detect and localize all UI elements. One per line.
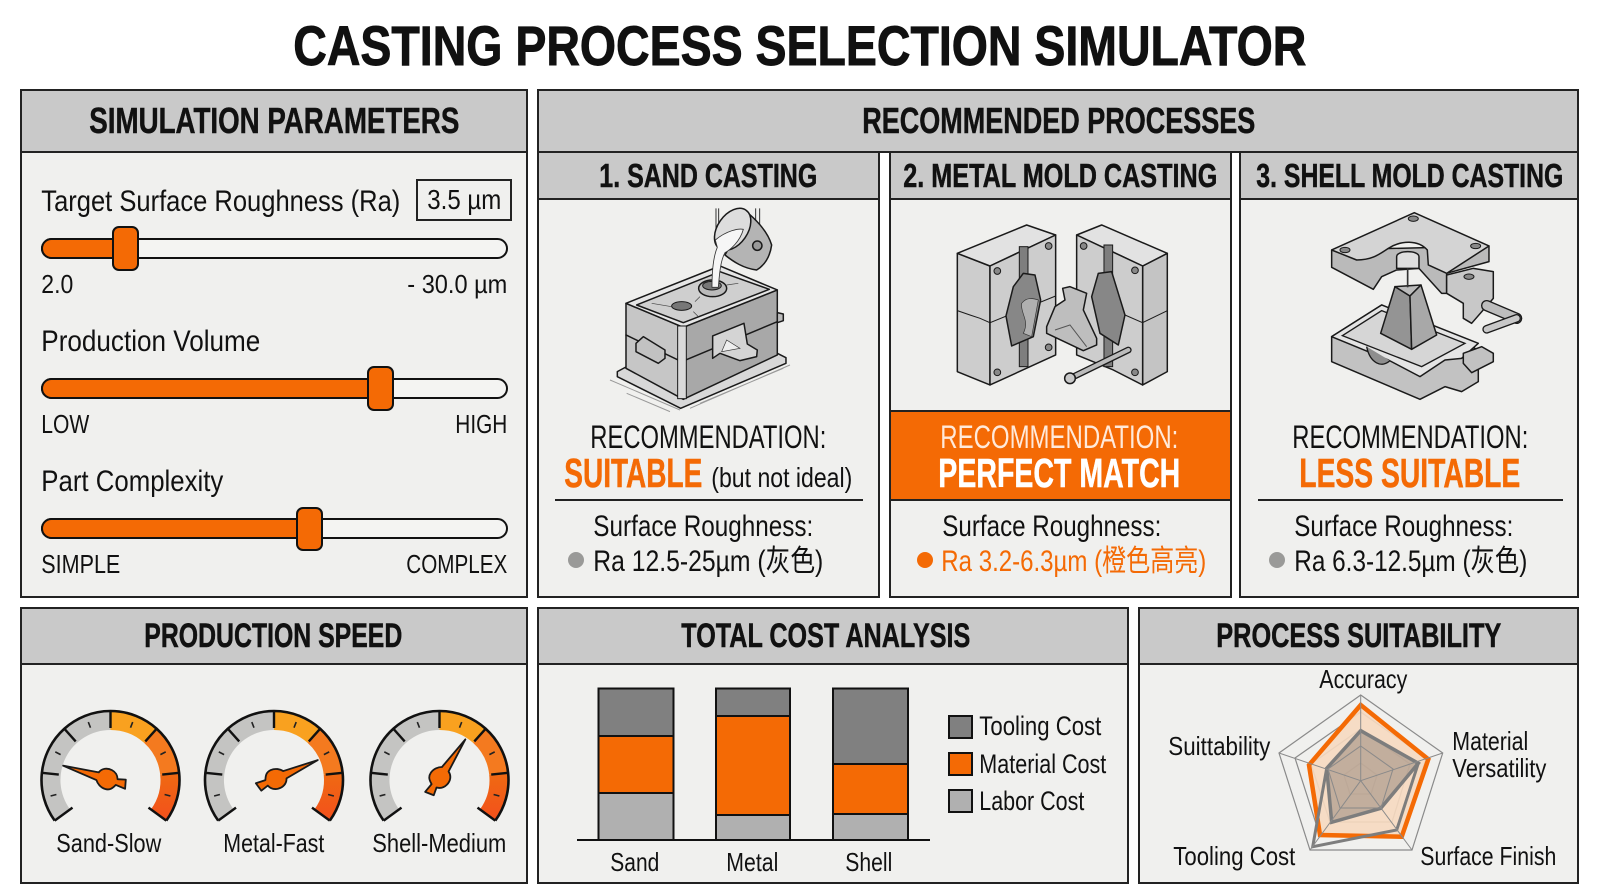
radar label: material versatility: Versatility [1452, 753, 1546, 783]
axis label: shell: Shell [845, 847, 892, 877]
heading: recommended processes: RECOMMENDED PROCESSES [862, 100, 1255, 141]
legend: Material Cost [979, 749, 1107, 779]
gauge: metal fast [205, 711, 343, 858]
status dot: gray [1269, 552, 1285, 568]
label: part complexity: Part Complexity [41, 465, 223, 498]
panel: process suitability [1139, 608, 1578, 883]
label: target surface roughness: Target Surface Roughness (Ra) [41, 185, 400, 218]
panel: production speed [21, 608, 527, 883]
card: metal mold casting [890, 152, 1231, 597]
radar label: material versatility [1452, 726, 1546, 783]
slider: production volume [42, 367, 507, 410]
heading: process suitability: PROCESS SUITABILITY [1216, 617, 1502, 655]
radar label: material versatility: Material [1452, 726, 1528, 756]
recommendation banner: perfect match [890, 411, 1231, 500]
axis label: sand: Sand [610, 847, 659, 877]
surface roughness label: shell: Surface Roughness: [1294, 510, 1513, 543]
bar: metal [716, 688, 790, 840]
surface roughness label: metal: Surface Roughness: [942, 510, 1161, 543]
card: shell mold casting [1240, 152, 1578, 597]
illustration: shell mold halves and cone pattern [1332, 213, 1517, 399]
status dot: orange [917, 552, 933, 568]
gauge: shell medium: Shell-Medium [372, 828, 506, 858]
label: high: HIGH [455, 409, 507, 439]
panel: total cost analysis [538, 608, 1128, 883]
axis label: metal: Metal [726, 847, 778, 877]
title: CASTING PROCESS SELECTION SIMULATOR [293, 14, 1306, 77]
gauge: shell medium [370, 711, 508, 858]
slider: surface roughness [42, 227, 507, 270]
legend: Tooling Cost [979, 711, 1102, 741]
label: complex: COMPLEX [406, 549, 507, 579]
legend [949, 711, 1107, 816]
label: simple: SIMPLE [41, 549, 120, 579]
radar label: suitability: Suittability [1168, 731, 1270, 761]
panel: simulation parameters [21, 90, 527, 597]
surface roughness label: sand: Surface Roughness: [593, 510, 813, 543]
card: sand casting [538, 152, 879, 597]
bar: sand [598, 688, 674, 840]
radar label: surface finish: Surface Finish [1420, 841, 1556, 871]
gauge: sand slow [41, 711, 180, 858]
heading: total cost analysis: TOTAL COST ANALYSIS [681, 617, 970, 655]
radar label: tooling cost: Tooling Cost [1173, 841, 1296, 871]
value box: 3.5 µm [417, 180, 511, 220]
roughness value: shell: Ra 6.3-12.5µm (灰色) [1294, 545, 1527, 578]
bar: shell [833, 688, 908, 840]
radar chart [1279, 695, 1443, 850]
roughness value: metal: Ra 3.2-6.3µm (橙色高亮) [941, 545, 1206, 578]
recommendation banner: perfect match: PERFECT MATCH [938, 450, 1180, 496]
verdict note: but not ideal: (but not ideal) [711, 462, 852, 493]
legend: Labor Cost [979, 786, 1085, 816]
illustration: open metal mold with part [957, 225, 1167, 385]
gauge: sand slow: Sand-Slow [56, 828, 161, 858]
label: roughness minimum: 2.0 [41, 269, 73, 299]
status dot: gray [568, 552, 584, 568]
verdict: suitable: SUITABLE [564, 450, 702, 496]
label: roughness maximum: - 30.0 µm [407, 269, 507, 299]
label: production volume: Production Volume [41, 325, 260, 358]
gauge: metal fast: Metal-Fast [223, 828, 325, 858]
label: low: LOW [41, 409, 90, 439]
panel: recommended processes [538, 90, 1578, 597]
heading: production speed: PRODUCTION SPEED [144, 617, 402, 655]
value box: 3.5 µm: 3.5 µm [427, 184, 501, 215]
heading: simulation parameters: SIMULATION PARAMETERS [89, 100, 459, 141]
stacked bar chart [577, 688, 930, 840]
heading: sand casting: 1. SAND CASTING [599, 157, 817, 194]
heading: metal mold casting: 2. METAL MOLD CASTING [903, 157, 1217, 194]
recommendation banner: perfect match: RECOMMENDATION: [940, 419, 1178, 455]
radar label: accuracy: Accuracy [1319, 664, 1407, 694]
recommendation label: sand: RECOMMENDATION: [590, 419, 826, 455]
slider: part complexity [42, 508, 507, 550]
illustration: ladle pouring into sand mold [610, 202, 790, 412]
roughness value: sand: Ra 12.5-25µm (灰色) [593, 545, 823, 578]
